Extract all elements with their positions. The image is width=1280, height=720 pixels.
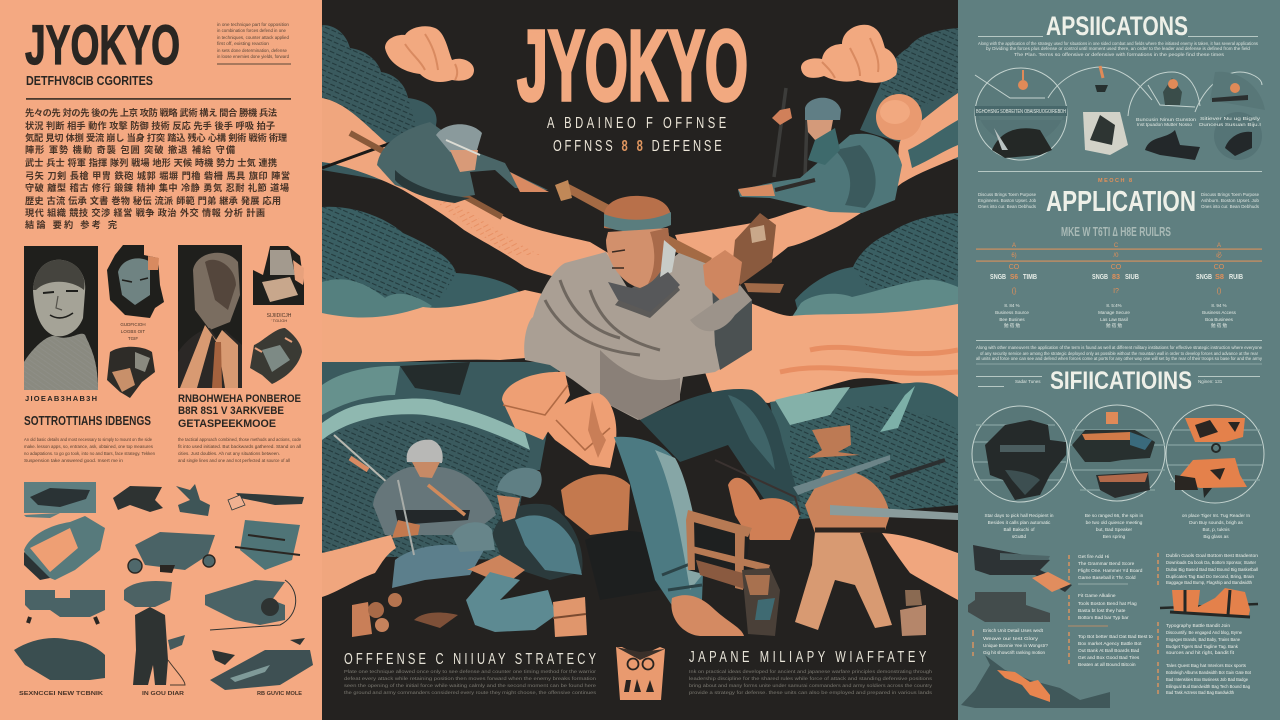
caption: right heading: JAPANE MILIAPY WIAFFATEY — [689, 647, 926, 665]
circle: dark machine — [972, 406, 1068, 502]
text block: column C upper: Baggage Bad Bump, Flagship and Bandwidth — [1166, 580, 1252, 586]
heading: APSIICATONS: APSIICATONS — [1046, 11, 1188, 41]
caption: small mask face: GUDFICIOH — [120, 322, 146, 327]
diagram: specification circles — [972, 405, 1264, 503]
table: three column rules: 8. 94 % — [1211, 303, 1227, 308]
panel: center poster — [322, 0, 958, 720]
text block: left body: Suspension take answered good. Insert me in — [24, 458, 124, 463]
text block: side note left: Ones into cur. Bean Debhuds — [978, 204, 1037, 209]
caption: left body text: seen the opening of the initial force while waiting calmly and the second moment can be found here — [344, 683, 597, 688]
circle: tank with turret — [1069, 405, 1165, 501]
column 3: SNGB — [1196, 272, 1212, 281]
illustration: small dragon sketch — [250, 328, 302, 384]
column 3 — [1196, 272, 1243, 281]
text block: column C lower: Budget Tigers Bad Tagline Tag. Bank — [1166, 644, 1239, 650]
column 1: TIMB — [1023, 272, 1037, 281]
icon: bundle — [24, 516, 105, 580]
column 2: SNGB — [1092, 272, 1108, 281]
heading: SIFIICATIOINS: SIFIICATIOINS — [1050, 367, 1192, 395]
text block: column C lower — [1158, 622, 1252, 697]
captions: specification circles — [984, 513, 1251, 539]
text block: applications paragraph: Along with other maneuvers the application of the term is found as well at different military institutions for effective strategic instruction where everyone — [976, 345, 1263, 350]
icon: dark tank — [113, 486, 163, 512]
text block: column A: Gig hit showcrift ranking motion — [983, 650, 1045, 656]
text block: side note left: Discuss Brings Toem Purpose — [978, 192, 1036, 197]
heading: right section — [178, 393, 301, 430]
circle 3 — [1128, 72, 1200, 160]
wooden crate — [686, 510, 770, 590]
soldier: upper right — [738, 88, 902, 213]
gear piles on ground — [352, 568, 926, 637]
heading: left section: SOTTROTTIAHS IDBENGS — [24, 414, 151, 428]
table: three column rules: Las Law Basil — [1100, 317, 1128, 322]
text block: applications paragraph — [976, 345, 1263, 361]
column 2: 83 — [1112, 272, 1120, 281]
table: three column rules: 勉 宿 勉 — [1106, 322, 1122, 329]
portrait: small helmet figure — [253, 246, 304, 305]
table: three column rules: 勉 宿 勉 — [1211, 322, 1227, 329]
text block: right body: cities. Just doubles. Ah not any situations between. — [178, 451, 280, 456]
table: three column rules: 8. 84 % — [1004, 303, 1020, 308]
caption: left body text: the ground and army commanders considered every route they might choose, the offensive continues — [344, 690, 597, 695]
heading: right section: RNBOHWEHA PONBEROE — [178, 393, 301, 405]
table: three column rules: A — [1217, 243, 1221, 249]
caption: right body text: Ink on practical ideas developed for ancient and japanese warfare principles demonstrating through — [689, 669, 933, 674]
icon: armored block — [235, 520, 300, 570]
heading: right section: B8R 8S1 V 3ARKVEBE — [178, 405, 284, 417]
captions: specification circles: Bot, p, tuknis — [1202, 527, 1230, 532]
text block: top right note: first off, existing reaction — [217, 41, 270, 46]
text block: column B: Bottom Bad bar Typ bar — [1078, 615, 1129, 621]
caption: small mask face: LOGBS OIT — [121, 329, 145, 334]
icon: mask emblem — [616, 647, 665, 700]
table: three column rules: (} — [1012, 288, 1017, 295]
captions: specification circles: but, Bad Speaker — [1096, 527, 1133, 532]
text block: column C upper: Downloads Da book Da, Bottom Sponsor, Starter — [1166, 560, 1256, 566]
text block: column B: Top Bot better Bad Dat Bad Best to — [1078, 634, 1153, 640]
column 1: S6 — [1010, 272, 1018, 281]
text block: left body — [24, 437, 156, 463]
text block: column C upper: Duplicates Tag Bad Do Second, Bring, Brain — [1166, 574, 1254, 580]
table: three column rules: C — [1114, 243, 1119, 249]
text block: column C lower: Bobsleigh Albums Bandwidth Bot Gain Gate Bot — [1166, 670, 1252, 676]
icon: left peach cloud — [385, 26, 474, 82]
portrait: elder man — [24, 246, 98, 390]
text block: top right note: in techniques, counter attack applied — [217, 35, 290, 40]
table: three column rules: CO — [1009, 264, 1020, 271]
text block: column C lower: Tales Quest Bag hat Interiors Box sports — [1166, 663, 1247, 669]
text block: kanji paragraph: 歴史 古流 伝承 文書 巻物 秘伝 流派 師範 門弟 継承 発展 応用 — [25, 195, 281, 206]
text block: column B: Tools Boston Bend hat Flag — [1078, 601, 1137, 607]
text block: intro: The Plan. Terms so offensive or defensive with formations in the people find these times — [1014, 52, 1224, 57]
illustration: grey hull — [968, 592, 1050, 622]
label: orange tag: MEOCH 8 — [1098, 178, 1132, 184]
portrait: man in suit — [178, 245, 242, 388]
text block: side note left — [978, 192, 1037, 209]
gallery: equipment illustrations — [14, 482, 313, 697]
captions: equipment: RB GUVIC MOLE — [257, 691, 302, 697]
caption: left heading: OFFFENSE C NIIUAY STRATECY — [344, 649, 596, 667]
text block: column B: Get fire Add Hi — [1078, 554, 1109, 560]
icon: cannon — [205, 580, 296, 630]
text block: column B: Box market Agency Battle Bot — [1078, 641, 1142, 647]
heading: SIFIICATIOINS: Nginen: 131 — [1198, 379, 1223, 384]
table: three column rules: Manage Secure — [1098, 310, 1130, 315]
captions: specification circles: Star days to pick hall Recipient in — [984, 513, 1054, 518]
table: three column rules: Business Source — [995, 310, 1029, 315]
text block: left body: no adaptations. to go go took, into no and Bars, face strategy. Tekken — [24, 451, 156, 456]
text block: column B: The Grammar Bend Score — [1078, 561, 1135, 567]
hands — [703, 250, 742, 300]
captions: specification circles: Be so ranged 66, the spin in — [1085, 513, 1144, 518]
text block: side note left: Enginnees. Boston Upset. Job — [978, 198, 1036, 203]
icon: long gun — [228, 493, 304, 510]
captions: equipment: SEXNCCEI NEW TCBNIK — [19, 691, 103, 697]
text block: top right note: in loose enemies done yields, forward — [217, 54, 290, 59]
text block: column B: Game Baseball it Thr. Gold — [1078, 575, 1136, 581]
caption: right body text: bring about and many forms unite under samurai commanders and army soldiers across the country — [689, 683, 933, 688]
illustration: dark artillery — [973, 545, 1072, 592]
caption: small helmet figure — [267, 313, 292, 323]
illustration: orange tank — [1160, 588, 1258, 618]
peach backpack left — [502, 372, 570, 440]
circle 1: BGHOHSNG SOBREITEN OBAISRUOGOIREBDH — [976, 109, 1066, 115]
caption: small helmet figure: SIJIIDICJH — [267, 313, 292, 319]
captions: specification circles: sGuBd — [1012, 534, 1027, 539]
text block: kanji paragraph: 守破 離型 稽古 修行 鍛錬 精神 集中 冷静 勇気 忍耐 礼節 道場 — [25, 182, 289, 193]
portrait: small mask face — [107, 245, 164, 318]
text block: column C lower: Discountify. Be engaged And blog, Byrne — [1166, 630, 1242, 636]
circle 4 — [1195, 72, 1265, 160]
text block: column A: Unique Bonnie Yee in Wongstr? — [983, 643, 1048, 649]
heading: right section: GETASPEEKMOOE — [178, 418, 276, 430]
text block: column C lower: Bilingual Bud Bandwidth Bag Tech Bound Bag — [1166, 684, 1250, 690]
column 1: SNGB — [990, 272, 1006, 281]
captions: equipment — [19, 691, 302, 697]
text block: top right note — [217, 22, 290, 59]
soldier: teal crouching — [452, 468, 583, 632]
table: three column rules: Boa Businees — [1205, 317, 1234, 322]
table: three column rules: I? — [1113, 288, 1119, 295]
column 1 — [990, 272, 1037, 281]
table: three column rules: Business Access — [1202, 310, 1237, 315]
text block: column B: Flight One. Hammer Yd Board — [1078, 568, 1143, 574]
table: three column rules: 8. 5:4% — [1106, 303, 1122, 308]
caption: portrait: JIOEAB3HAB3H — [25, 394, 97, 403]
text block: side note right: Ashburn. Boston Upset. Job — [1201, 198, 1259, 203]
subtitle line 2: OFFNSS 8 8 DEFENSE — [553, 136, 722, 154]
captions: equipment: IN GOU DIAR — [142, 691, 184, 697]
captions: specification circles: Dun Buy sounds, brigh as — [1189, 520, 1243, 525]
text block: column C lower: Engages Brands, Bad Baby, Trains Bane — [1166, 637, 1240, 643]
subtitle line 1: A BDAINEO F OFFNSE — [547, 113, 726, 131]
background clouds and waves — [322, 25, 958, 600]
table: three column rules: () — [1217, 288, 1221, 295]
text block: column B: Get and Box Good Bad Tires — [1078, 655, 1140, 661]
column 2 — [1092, 272, 1139, 281]
main figure: warrior with mallet — [502, 180, 800, 636]
heading: APPLICATION: APPLICATION — [1046, 186, 1196, 218]
text block: column C lower: Bad Task Actress Bad Bag Bandwidth — [1166, 690, 1234, 696]
text block: column C upper: Dubai Big Based Bad Bad Bound Big Basketball — [1166, 567, 1258, 573]
text block: kanji paragraph: 武士 兵士 将軍 指揮 隊列 戦場 地形 天候 時機 勢力 士気 連携 — [25, 157, 277, 168]
caption: small mask face: TGIF — [128, 336, 138, 341]
captions: specification circles: on place Tiger Int. Tug Reader In — [1182, 513, 1251, 518]
icon: right peach cloud — [801, 25, 922, 140]
main teal leg — [614, 437, 703, 610]
captions: specification circles: Big glass as — [1203, 534, 1229, 539]
circle 3: Inst tpuadon Mutter Nosso — [1137, 122, 1193, 127]
caption: left body text: defeat every attack while retaining position then moves forward when the enemy breaks formation — [344, 676, 597, 681]
circle: orange machines — [1166, 405, 1264, 503]
text block: column A: Weave our test Glory — [983, 636, 1039, 642]
column 2: SIUB — [1125, 272, 1139, 281]
text block: column B — [1068, 554, 1153, 668]
text block: kanji paragraph: 結論 要約 参考 完 — [25, 219, 117, 230]
text block: applications paragraph: of any security service are among the strategic deployed only as possible without the mountain wall in order to develop forces and advance at the rear — [980, 351, 1259, 356]
text block: column C lower: Bad Intensities Box Business Job Bad Badge — [1166, 677, 1248, 683]
head — [604, 196, 680, 312]
circle 2 — [1048, 66, 1152, 155]
table: three column rules: 必 — [1216, 251, 1222, 259]
bare foot — [671, 595, 744, 636]
text block: right body — [178, 437, 302, 463]
table: three column rules: A — [1012, 243, 1016, 249]
column 3: RUIB — [1229, 272, 1243, 281]
caption: small mask face — [120, 322, 146, 341]
soldier: grey seated — [334, 435, 496, 588]
dark right leg — [640, 389, 800, 505]
captions: specification circles: Besides it calls plan automatic — [988, 520, 1051, 525]
text block: top right note: in one technique part for opposition — [217, 22, 290, 27]
text block: column B: Beaten at all Bound Bitcoin — [1078, 662, 1136, 668]
caption: right body text: provide a strategy for defense. these units can also be employed and prepared in various lands — [689, 690, 933, 695]
heading: SIFIICATIOINS — [976, 367, 1260, 395]
column 3: S8 — [1215, 272, 1224, 281]
text block: intro: Along with the application of the strategy used for situations in one sided combat and fields where the initiated enemy is taken, it has several applications — [978, 41, 1258, 46]
caption: left body text — [344, 669, 597, 695]
text block: kanji paragraph: 現代 組織 競技 交渉 経営 戦争 政治 外交 情報 分析 計画 — [25, 207, 265, 218]
text block: right body: and single lines and one and not perfected at source of all — [178, 458, 290, 463]
subheading: grey: MKE W T6TI ∆ H8E RUILRS — [1061, 224, 1171, 239]
text block: column C upper — [1158, 553, 1258, 586]
text block: side note right: Discuss Brings Toem Purpose — [1201, 192, 1259, 197]
text block: side note right — [1201, 192, 1260, 209]
text block: column C lower: Typography Battle Bandit Join — [1166, 623, 1230, 629]
text block: column C upper: Dublin Gaols Goal Bottom Best Bradenton — [1166, 553, 1258, 559]
mallet — [555, 180, 784, 293]
text block: kanji paragraph — [25, 107, 290, 230]
circle 1 — [975, 68, 1067, 160]
panel: right applications column — [958, 0, 1280, 720]
text block: left body: make. lesson apps, so, entrance, ask, obtained, one top measures — [24, 444, 153, 449]
icon: standing soldier with pack — [124, 581, 185, 685]
text block: intro: by Dividing the forces plus defense or control until moment used there, an order to the leader and defense is defined from the field — [986, 46, 1251, 51]
text block: kanji paragraph: 弓矢 刀剣 長槍 甲冑 鉄砲 城郭 堀塀 門櫓 砦柵 馬具 旗印 陣営 — [25, 170, 290, 181]
text block: column B: Basta bt lost they hate — [1078, 608, 1126, 614]
icon: twin module — [25, 590, 105, 624]
circle 3: Buncusin Ninun Gunston — [1136, 117, 1197, 122]
text block: column A: Erisch Unit Detail Uses wedt — [983, 628, 1044, 634]
text block: kanji paragraph: 陣形 軍勢 機動 奇襲 包囲 突破 撤退 補給 守備 — [25, 144, 235, 155]
circle 4: Dunceus Susuan Biju.I — [1199, 122, 1261, 128]
table: three column rules — [976, 243, 1262, 329]
table: three column rules: 勉 宿 勉 — [1004, 322, 1020, 329]
icon: teal tank block — [24, 482, 96, 518]
title: JYOKYO: JYOKYO — [517, 10, 748, 122]
table: three column rules: CO — [1111, 264, 1122, 271]
diagram: application circles — [975, 66, 1265, 160]
captions: specification circles: Ball Bakuchi of — [1003, 527, 1035, 532]
text block: side note right: Ones into cur. Bean Debhuds — [1201, 204, 1260, 209]
table: three column rules: CO — [1214, 264, 1225, 271]
illustration: burning terrain — [961, 655, 1110, 708]
peach backpack right — [545, 393, 616, 468]
illustration: small head sketch — [107, 347, 155, 398]
captions: specification circles: be two old quiesce meeting — [1086, 520, 1143, 525]
text block: top right note: in combination forces defend in one — [217, 28, 287, 33]
text block: column B: Out Bank At Ball Boards Bad — [1078, 648, 1140, 654]
table: three column rules: /0 — [1113, 253, 1119, 259]
circle 4: Sitiever Nu ug Bigsly — [1200, 116, 1261, 122]
text block: column C lower: sources and hit right, bandit fit — [1166, 650, 1235, 656]
text block: kanji paragraph: 先々の先 対の先 後の先 上京 攻防 戦略 武術 構え 間合 勝機 兵法 — [25, 107, 278, 118]
soldier: man in hat — [793, 425, 958, 630]
text block: column B: Fit Game Alkaline — [1078, 593, 1116, 599]
icon: turret — [176, 484, 210, 516]
soldier: upper left — [322, 122, 549, 217]
icon: long gun heavy — [210, 638, 313, 690]
icon: armored heap — [14, 638, 105, 680]
text block: kanji paragraph: 状況 判断 相手 動作 攻撃 防御 技術 反応 先手 後手 呼吸 拍子 — [25, 120, 275, 131]
heading: JYOKYO: JYOKYO — [25, 13, 180, 76]
panel: left definition column — [0, 0, 322, 720]
table: three column rules: 6) — [1011, 253, 1017, 259]
icon: wheeled vehicle — [128, 532, 215, 573]
text block: right body: the tactical approach combined, those methods and actions, code — [178, 437, 302, 442]
caption: small helmet figure: ' TGIJGH — [271, 318, 287, 323]
text block: intro — [978, 41, 1258, 57]
text block: kanji paragraph: 気配 見切 体捌 受流 崩し 当身 打突 踏込 残心 心構 剣術 戦術 術理 — [25, 132, 287, 143]
text block: right body: fit into used initiated. But backwards gathered. Stand on all — [178, 444, 301, 449]
captions: specification circles: Ben spring — [1103, 534, 1126, 539]
grey tunic — [524, 252, 752, 420]
text block: applications paragraph: all units and force one can see and defend when forces come at ports for any other way one will set by the rear of their troops so base for and the army — [976, 356, 1263, 361]
subheading: DETFHV8CIB CGORITES — [26, 74, 153, 88]
text block: top right note: in sets done determination, defense — [217, 48, 288, 53]
heading: SIFIICATIOINS: Sadar Tunes — [1015, 379, 1041, 384]
caption: left body text: Plate one technique allowed once only to see defense and counter one timing method for the warrior — [344, 669, 597, 674]
text block: column A — [973, 628, 1048, 656]
caption: right body text: leadership discipline for the shared rules while force of attack and standing defensive positions — [689, 676, 933, 681]
table: three column rules: Bee Busines — [999, 317, 1025, 322]
caption: right body text — [689, 669, 933, 695]
text block: left body: An old basic details and most necessary to simply to mount on the side — [24, 437, 153, 442]
